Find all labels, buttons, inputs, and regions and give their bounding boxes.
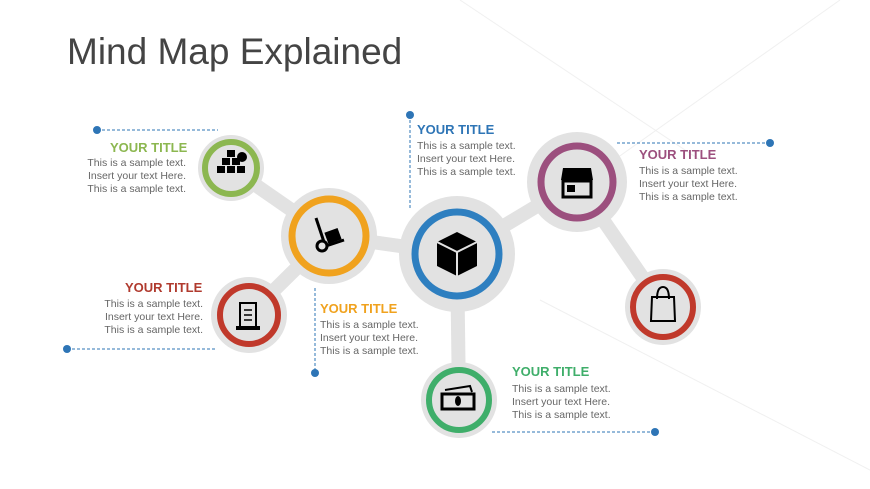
- text: Insert your text Here.: [417, 153, 515, 165]
- text: YOUR TITLE: [417, 122, 494, 137]
- title: Mind Map Explained: [67, 31, 402, 72]
- text: red left: [104, 280, 203, 336]
- text: green: [87, 140, 187, 195]
- text: YOUR TITLE: [110, 140, 187, 155]
- text: This is a sample text.: [512, 383, 611, 395]
- node: money (green bottom): [421, 362, 497, 438]
- text: YOUR TITLE: [512, 364, 589, 379]
- text: Insert your text Here.: [639, 178, 737, 190]
- text: This is a sample text.: [320, 319, 419, 331]
- node: shopping bag (red right): [625, 269, 701, 345]
- text: This is a sample text.: [639, 191, 738, 203]
- node: box (blue center): [399, 196, 515, 312]
- text: This is a sample text.: [417, 166, 516, 178]
- text: Insert your text Here.: [105, 311, 203, 323]
- node: store (purple): [527, 132, 627, 232]
- connectors: [231, 168, 663, 400]
- node: boxes (green): [198, 135, 264, 201]
- text: This is a sample text.: [320, 345, 419, 357]
- text: Insert your text Here.: [512, 396, 610, 408]
- text: This is a sample text.: [639, 165, 738, 177]
- text: YOUR TITLE: [320, 301, 397, 316]
- dashed leader lines: [63, 111, 774, 436]
- text: This is a sample text.: [512, 409, 611, 421]
- text: YOUR TITLE: [639, 147, 716, 162]
- text: blue: [417, 122, 516, 178]
- text: This is a sample text.: [104, 324, 203, 336]
- text: green bottom: [512, 364, 611, 421]
- text: This is a sample text.: [104, 298, 203, 310]
- text: Insert your text Here.: [320, 332, 418, 344]
- text: This is a sample text.: [87, 183, 186, 195]
- text: YOUR TITLE: [125, 280, 202, 295]
- text: This is a sample text.: [87, 157, 186, 169]
- text: purple: [639, 147, 738, 203]
- text: orange: [320, 301, 419, 357]
- text: Insert your text Here.: [88, 170, 186, 182]
- text: This is a sample text.: [417, 140, 516, 152]
- node: hand truck (orange): [281, 188, 377, 284]
- node: scroll (red left): [211, 277, 287, 353]
